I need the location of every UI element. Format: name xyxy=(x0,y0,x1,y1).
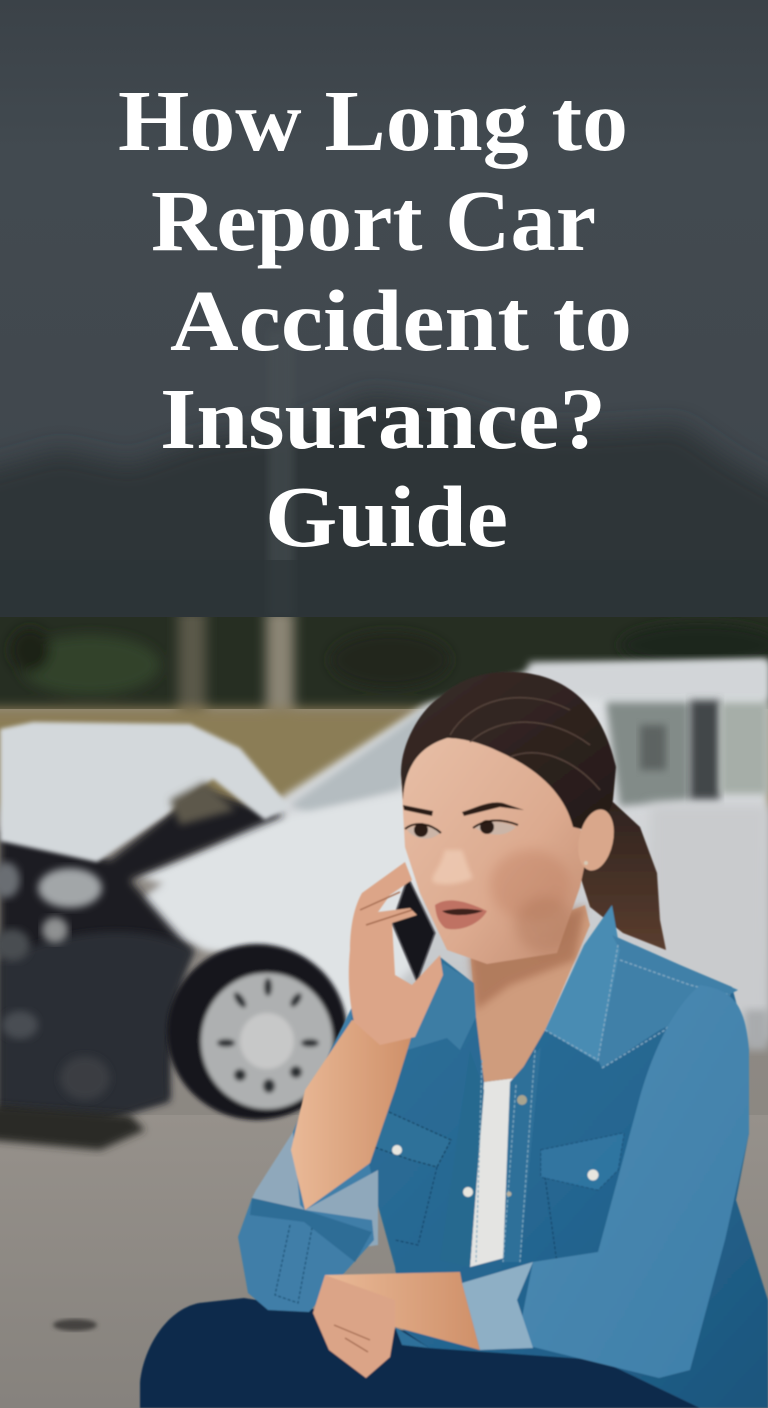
title: How Long to xyxy=(118,72,628,169)
woman on the phone xyxy=(140,672,768,1408)
dark title panel xyxy=(0,0,768,640)
title: Insurance? xyxy=(160,370,606,467)
photo: accident scene background xyxy=(0,610,768,1408)
shirt pockets xyxy=(374,1108,624,1263)
crashed dark car xyxy=(0,722,290,1150)
shirt hem xyxy=(395,1327,429,1348)
neck and chest xyxy=(470,905,590,1082)
left forearm sleeve xyxy=(238,1007,378,1312)
face xyxy=(401,715,590,964)
hand holding phone xyxy=(349,862,443,1045)
ear xyxy=(573,806,619,874)
phone xyxy=(392,877,435,982)
shirt buttons xyxy=(392,1095,598,1197)
rolled right cuff xyxy=(462,1262,533,1350)
white t-shirt xyxy=(470,1078,515,1267)
eyes xyxy=(407,826,440,839)
folded forearm xyxy=(325,1272,480,1350)
left forearm xyxy=(291,1020,412,1210)
jeans xyxy=(140,1298,700,1408)
car wheel xyxy=(167,944,347,1120)
shirt placket xyxy=(440,1047,541,1267)
eyebrows xyxy=(403,802,524,816)
nose xyxy=(432,850,473,884)
lips xyxy=(435,900,487,929)
denim shirt torso xyxy=(340,935,768,1408)
right sleeve xyxy=(517,985,749,1378)
title xyxy=(118,72,632,565)
title: Accident to xyxy=(170,272,632,369)
shirt collar xyxy=(407,905,738,1068)
title: Report Car xyxy=(151,172,596,269)
hair xyxy=(401,672,616,830)
ponytail xyxy=(575,790,666,950)
white car xyxy=(135,660,768,1050)
resting hand xyxy=(313,1275,395,1378)
title: Guide xyxy=(265,468,508,565)
